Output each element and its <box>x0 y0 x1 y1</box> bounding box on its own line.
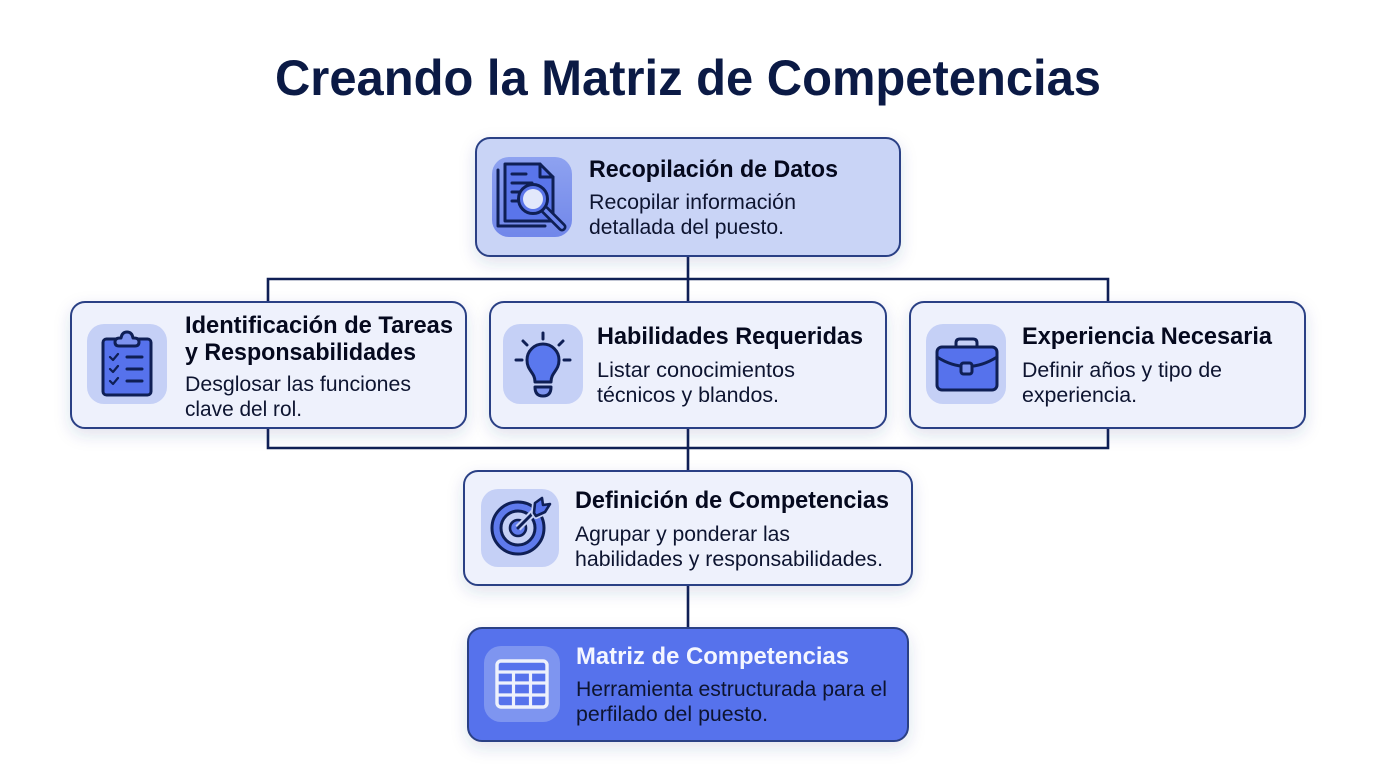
description: Listar conocimientos <box>597 359 795 382</box>
description <box>576 678 887 726</box>
connectors: bottom merge <box>268 428 1108 628</box>
description <box>575 523 883 571</box>
heading <box>185 312 453 366</box>
panel: Habilidades Requeridas <box>490 302 886 428</box>
description: clave del rol. <box>185 398 302 421</box>
description: Definir años y tipo de <box>1022 359 1222 382</box>
heading: Identificación de Tareas <box>185 312 453 339</box>
heading: Recopilación de Datos <box>589 156 838 183</box>
description: habilidades y responsabilidades. <box>575 548 883 571</box>
icon: table grid <box>484 646 560 722</box>
icon: light bulb <box>503 324 583 404</box>
description <box>589 191 796 239</box>
description: Desglosar las funciones <box>185 373 411 396</box>
description: Agrupar y ponderar las <box>575 523 790 546</box>
icon: document with magnifier <box>492 157 572 237</box>
panel: Matriz de Competencias <box>468 628 908 741</box>
description: experiencia. <box>1022 384 1137 407</box>
panel: Recopilación de Datos <box>476 138 900 256</box>
panel: Experiencia Necesaria <box>910 302 1305 428</box>
description <box>597 359 795 407</box>
description: técnicos y blandos. <box>597 384 779 407</box>
description: Recopilar información <box>589 191 796 214</box>
connectors: top branch <box>268 256 1108 302</box>
heading: Habilidades Requeridas <box>597 323 863 350</box>
description: detallada del puesto. <box>589 216 784 239</box>
icon: clipboard checklist <box>87 324 167 404</box>
description <box>1022 359 1222 407</box>
panel: Identificación de Tareas <box>71 302 466 428</box>
heading: Experiencia Necesaria <box>1022 323 1273 350</box>
title: Creando la Matriz de Competencias <box>275 50 1101 106</box>
panel: Definición de Competencias <box>464 471 912 585</box>
description: Herramienta estructurada para el <box>576 678 887 701</box>
description: perfilado del puesto. <box>576 703 768 726</box>
icon: briefcase <box>926 324 1006 404</box>
icon: target with arrow <box>481 489 559 567</box>
heading: Definición de Competencias <box>575 487 889 514</box>
description <box>185 373 411 421</box>
heading: Matriz de Competencias <box>576 643 849 670</box>
heading: y Responsabilidades <box>185 339 416 366</box>
